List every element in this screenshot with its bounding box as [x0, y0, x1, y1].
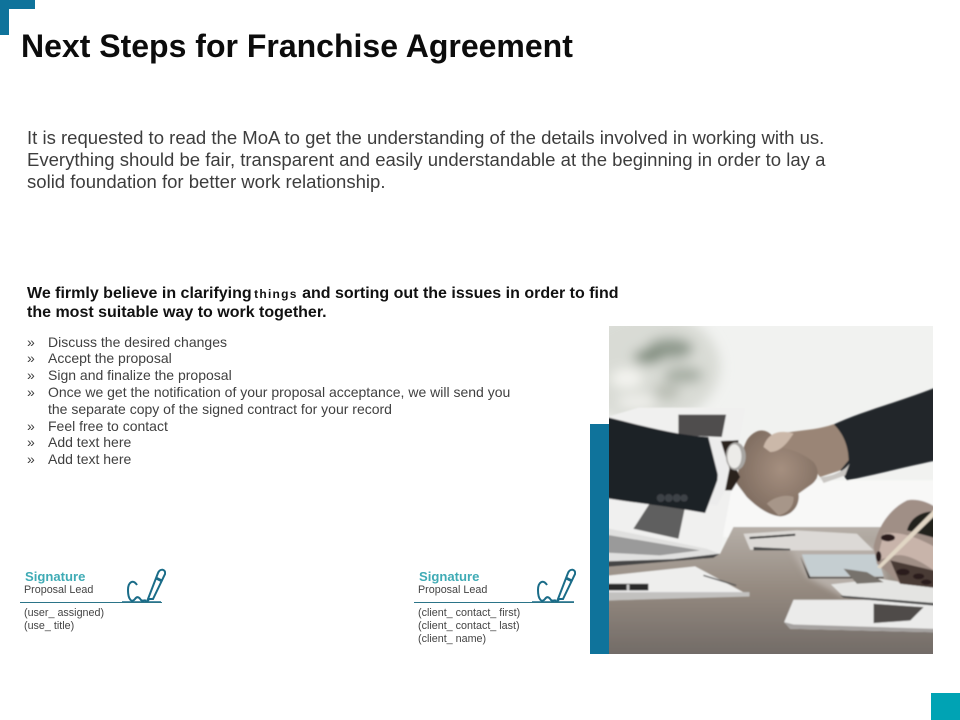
signature block: user: (user_ assigned) [24, 607, 104, 619]
signature block: client: Signature [419, 569, 479, 584]
pen [877, 500, 944, 569]
laptop base [597, 526, 719, 564]
signature block: client [414, 568, 576, 645]
corner accent: top left [0, 0, 35, 35]
corner accent: bottom right [931, 693, 960, 720]
bullet list: Discuss the desired changes [48, 334, 227, 350]
bullet list: » [27, 434, 35, 450]
lower bright zone [723, 480, 944, 537]
intro paragraph [27, 127, 826, 192]
lead statement: the most suitable way to work together. [27, 304, 327, 321]
bullet list: the separate copy of the signed contract for your record [48, 401, 392, 417]
background [590, 320, 957, 687]
tablet front [784, 600, 944, 632]
tablet center [802, 554, 884, 576]
bullet list: Add text here [48, 434, 131, 450]
writing hand [874, 500, 944, 589]
intro paragraph: It is requested to read the MoA to get the understanding of the details involved in working with us. [27, 127, 824, 148]
laptop screen [597, 408, 745, 554]
back items [743, 530, 874, 550]
title: Next Steps for Franchise Agreement [21, 28, 573, 64]
bullet list: Sign and finalize the proposal [48, 367, 232, 383]
signature block: user: Proposal Lead [24, 584, 93, 596]
bullet list: Feel free to contact [48, 418, 168, 434]
bullet list: Once we get the notification of your proposal acceptance, we will send you [48, 384, 510, 400]
bullet list: » [27, 350, 35, 366]
bullet list: Accept the proposal [48, 350, 172, 366]
signature block: user: Signature [25, 569, 85, 584]
lead statement: We firmly believe in clarifying things and sorting out the issues in order to find [27, 285, 619, 302]
signature rule [20, 602, 162, 603]
bullet list: » [27, 334, 35, 350]
bullet list: » [27, 451, 35, 467]
intro paragraph: solid foundation for better work relationship. [27, 171, 385, 192]
shirt cuff [708, 438, 728, 505]
right sleeve [832, 384, 944, 480]
left sleeve [597, 415, 718, 513]
icon: signature pen [532, 568, 576, 602]
bullet list: Add text here [48, 451, 131, 467]
bullet list: » [27, 367, 35, 383]
signature block: user: (use_ title) [24, 620, 74, 632]
signature block: user [20, 568, 166, 632]
signature block: client: Proposal Lead [418, 584, 487, 596]
intro paragraph: Everything should be fair, transparent and easily understandable at the beginning in order to lay a [27, 149, 825, 170]
signature block: client: (client_ contact_ last) [418, 620, 520, 632]
signature block: client: (client_ name) [418, 633, 486, 645]
accent bar behind photo [590, 424, 609, 654]
lead statement [27, 285, 619, 321]
bullet list [27, 334, 510, 467]
papers left [597, 566, 749, 601]
signature block: client: (client_ contact_ first) [418, 607, 520, 619]
notebook right [831, 579, 944, 606]
bullet list: » [27, 384, 35, 400]
wristwatch [721, 440, 740, 490]
hands [763, 424, 849, 477]
bullet list: » [27, 418, 35, 434]
table [597, 527, 944, 667]
signature rule [414, 602, 574, 603]
icon: signature pen [122, 568, 166, 602]
photo: handshake at meeting table [609, 326, 933, 654]
plant [573, 310, 720, 424]
